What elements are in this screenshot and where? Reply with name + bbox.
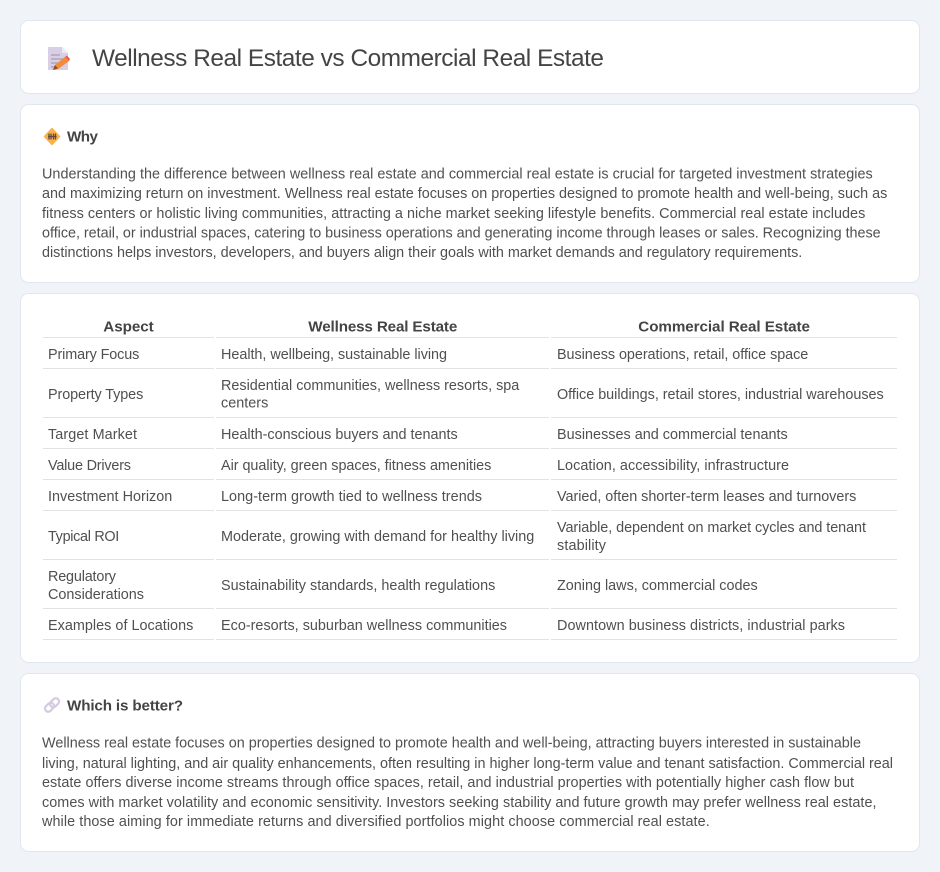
panel: which is better xyxy=(20,674,920,852)
row: regulatory considerations xyxy=(43,569,897,609)
paragraph: which is better xyxy=(41,736,893,830)
row: value drivers: Location, accessibility, infrastructure xyxy=(557,458,789,474)
row: examples of locations: Eco-resorts, suburban wellness communities xyxy=(221,618,507,634)
icon: document with pencil xyxy=(48,47,70,70)
paragraph: which is better: Wellness real estate focuses on properties designed to promote health and well-being, attracting buyers interested in sustainable xyxy=(42,736,861,752)
heading: which is better: Which is better? xyxy=(67,698,183,715)
row: target market: Businesses and commercial tenants xyxy=(557,427,788,443)
row: primary focus xyxy=(43,347,897,369)
row: examples of locations: Examples of Locations xyxy=(48,618,193,634)
row: target market: Health-conscious buyers and tenants xyxy=(221,427,458,443)
row: value drivers: Air quality, green spaces, fitness amenities xyxy=(221,458,491,474)
row: property types: Office buildings, retail stores, industrial warehouses xyxy=(557,387,884,403)
panel: why xyxy=(20,104,920,282)
paragraph: which is better: comes with market volatility and economic sensitivity. Investors seeking stability and future growth may prefer wellness real estate, xyxy=(42,795,876,811)
row: investment horizon xyxy=(43,489,897,511)
row: value drivers: Value Drivers xyxy=(48,458,131,474)
row: property types xyxy=(43,378,897,418)
row: primary focus: Primary Focus xyxy=(48,347,139,363)
row: typical roi: Typical ROI xyxy=(48,529,119,545)
row: typical roi: stability xyxy=(557,538,607,554)
row: property types: Residential communities, wellness resorts, spa xyxy=(221,378,519,394)
row: primary focus: Business operations, retail, office space xyxy=(557,347,808,363)
row: regulatory considerations: Regulatory xyxy=(48,569,117,585)
heading: why: Why xyxy=(67,129,99,146)
row: typical roi: Variable, dependent on market cycles and tenant xyxy=(557,520,866,536)
icon: orange diamond sign xyxy=(44,128,60,144)
paragraph: why: Understanding the difference between wellness real estate and commercial real estate is crucial for targeted investment strategies xyxy=(42,166,873,182)
row: typical roi: Moderate, growing with demand for healthy living xyxy=(221,529,534,545)
table header row: Aspect xyxy=(103,319,154,336)
icon: chain link xyxy=(44,697,60,713)
paragraph: which is better: while those aiming for immediate returns and diversified portfolios might choose commercial real estate. xyxy=(41,814,710,830)
panel: comparison table xyxy=(20,294,920,662)
paragraph: why xyxy=(42,166,887,261)
paragraph: why: and maximizing return on investment. Wellness real estate focuses on properties designed to promote health and well-being, such as xyxy=(42,186,887,202)
row: investment horizon: Varied, often shorter-term leases and turnovers xyxy=(557,489,856,505)
row: regulatory considerations: Sustainability standards, health regulations xyxy=(221,578,495,594)
paragraph: why: fitness centers or holistic living communities, attracting a niche market seeking lifestyle benefits. Commercial real estate includes xyxy=(42,206,865,222)
row: property types: Property Types xyxy=(48,387,143,403)
title: Wellness Real Estate vs Commercial Real Estate xyxy=(92,45,604,72)
row: value drivers xyxy=(43,458,897,480)
row: target market xyxy=(43,427,897,449)
panel: title header xyxy=(20,20,920,94)
row: typical roi xyxy=(43,520,897,560)
row: regulatory considerations: Considerations xyxy=(48,587,144,603)
paragraph: which is better: estate offers diverse income streams through office spaces, retail, and industrial properties with potentially higher cash flow but xyxy=(42,775,854,791)
paragraph: why: distinctions helps investors, developers, and buyers align their goals with market demands and regulatory requirements. xyxy=(42,245,802,261)
row: primary focus: Health, wellbeing, sustainable living xyxy=(221,347,447,363)
table header row: Wellness Real Estate xyxy=(308,319,457,336)
row: investment horizon: Investment Horizon xyxy=(48,489,172,505)
table header row xyxy=(43,319,897,338)
row: examples of locations xyxy=(43,618,897,640)
row: target market: Target Market xyxy=(48,427,137,443)
row: examples of locations: Downtown business districts, industrial parks xyxy=(557,618,845,634)
row: property types: centers xyxy=(221,396,268,412)
paragraph: why: office, retail, or industrial spaces, catering to business operations and generating income through leases or sales. Recognizing these xyxy=(42,226,881,242)
row: regulatory considerations: Zoning laws, commercial codes xyxy=(557,578,758,594)
paragraph: which is better: living, natural lighting, and air quality enhancements, often resulting in higher long-term value and tenant satisfaction. Commercial real xyxy=(42,756,893,772)
row: investment horizon: Long-term growth tied to wellness trends xyxy=(221,489,482,505)
table header row: Commercial Real Estate xyxy=(638,319,810,336)
